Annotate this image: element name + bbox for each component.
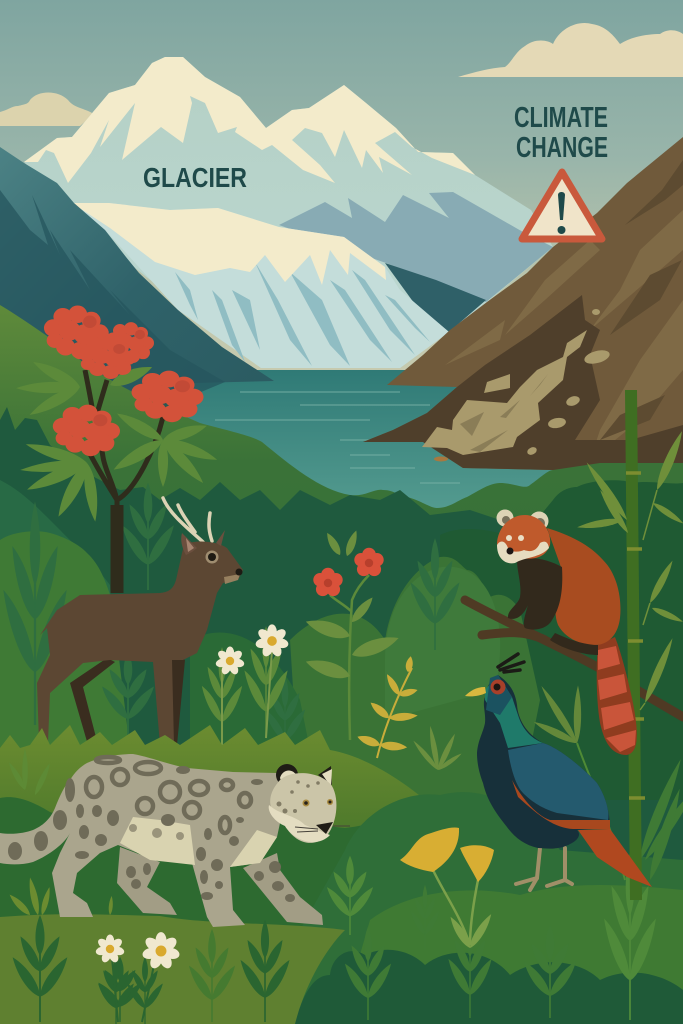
deer antlers: [163, 498, 212, 542]
mountain snow caps: [24, 57, 475, 183]
leopard body: [0, 754, 285, 927]
pheasant tail: [578, 829, 652, 887]
sky: [0, 0, 683, 400]
bamboo: [577, 390, 683, 900]
dark slide scar: [363, 295, 683, 470]
deer far legs: [70, 655, 185, 745]
deer body: [37, 542, 243, 745]
left mountain: [0, 147, 274, 430]
dim grass: [7, 748, 52, 796]
foreground right bushes: [295, 792, 683, 1024]
leopard belly: [120, 817, 277, 867]
small grass tuft: [411, 725, 463, 772]
flower clusters: [44, 306, 109, 359]
far blue ridge: [279, 192, 553, 302]
rocks: [484, 374, 510, 393]
pheasant wing: [508, 743, 608, 820]
landslide debris: [422, 330, 587, 455]
pheasant legs: [516, 848, 572, 890]
dark tree line: [0, 407, 683, 1024]
label: GLACIER: GLACIER: [143, 162, 247, 193]
right brown mountain: [363, 137, 683, 470]
glacier tongue: [72, 203, 449, 368]
pheasant beak and eye: [465, 687, 486, 696]
branch: [465, 600, 683, 717]
snow mountains: [24, 57, 553, 368]
cloud: top right: [458, 23, 683, 77]
left hills: [0, 480, 120, 750]
warning sign: [522, 172, 602, 239]
bottom daisies: [95, 932, 181, 1024]
panda dark limbs: [508, 558, 598, 655]
leopard far legs: [117, 847, 323, 925]
dark ridge behind glacier: [385, 263, 486, 332]
upper meadow: [0, 725, 425, 828]
rhododendron tree: [16, 306, 219, 593]
label: CLIMATE CHANGE: CHANGE: [516, 132, 608, 164]
mid bumps left of panda: [290, 557, 540, 800]
right dark hill: [440, 480, 683, 800]
mid-dark band behind leopard: [0, 795, 420, 930]
pheasant: [465, 654, 652, 890]
plants behind pheasant: [532, 684, 683, 882]
ginkgo plant: [400, 827, 495, 950]
cloud: left: [0, 92, 94, 126]
lower meadow: [0, 914, 345, 1024]
foreground sprigs: [342, 885, 579, 1020]
yellow sprig: [356, 656, 418, 758]
panda head: [496, 510, 550, 563]
white flowers: [199, 624, 291, 745]
centre flower stalk: [304, 529, 401, 740]
label: CLIMATE CHANGE: CLIMATE: [514, 102, 608, 134]
lake: [180, 370, 570, 515]
forest hills: [0, 305, 683, 1024]
pheasant body: [477, 675, 610, 849]
red panda: [496, 510, 637, 755]
panda body: [547, 528, 620, 645]
leopard rosettes: [86, 757, 251, 833]
label: CLIMATE CHANGE: [514, 102, 608, 164]
snow leopard: [0, 754, 350, 927]
deer: [37, 498, 243, 745]
background sprigs: [0, 483, 463, 760]
mountain facets: [445, 210, 683, 460]
leopard head: [269, 764, 350, 843]
panda tail: [597, 637, 637, 755]
